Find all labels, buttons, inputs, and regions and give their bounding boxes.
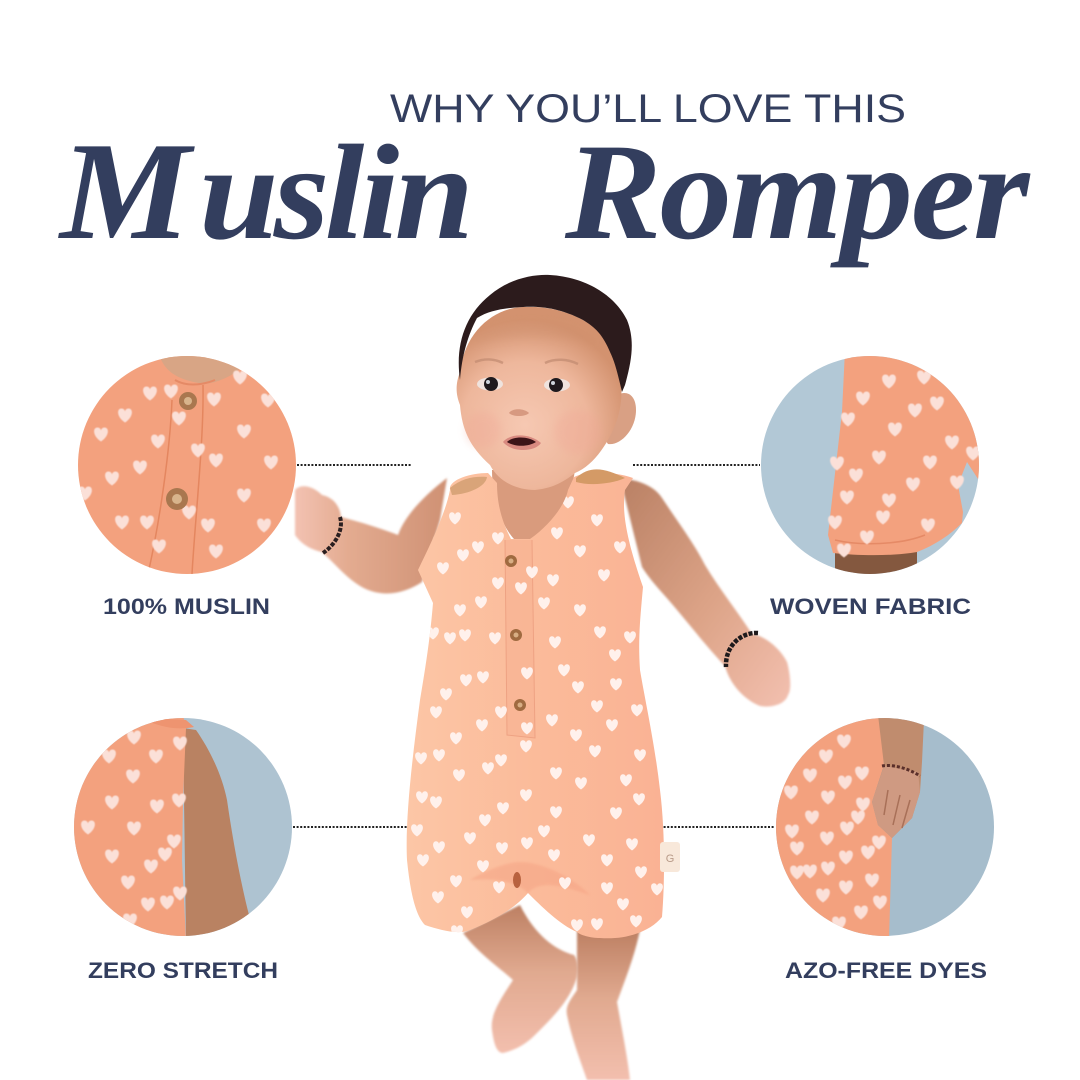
icon: wooden button (179, 392, 197, 410)
shoulder button tab left (450, 477, 487, 495)
panel: 100% muslin detail circle (78, 350, 296, 574)
label: 100% muslin: 100% MUSLIN (103, 594, 270, 619)
subtitle: WHY YOU’LL LOVE THIS (390, 86, 906, 130)
baby forehead shade (470, 322, 600, 345)
title: Romper (564, 115, 1031, 268)
bracelet (882, 765, 920, 776)
connector: azo-free dyes (660, 826, 775, 828)
panel: azo-free dyes detail circle (770, 715, 994, 940)
baby left eye (477, 377, 503, 391)
neck (492, 470, 575, 540)
illustration: baby in peach romper (295, 275, 790, 1080)
baby mouth (503, 435, 541, 450)
icon: wooden button lower (166, 488, 188, 510)
bracelet right (726, 633, 758, 667)
icon: romper button middle (510, 629, 522, 641)
baby hair (459, 275, 632, 392)
garment tag (660, 842, 680, 872)
romper hearts (411, 496, 663, 938)
baby cheeks (465, 410, 602, 454)
bracelet left (323, 517, 341, 553)
baby brows (475, 359, 578, 364)
panel: woven fabric detail circle (761, 350, 985, 580)
garment tag: G (666, 853, 674, 865)
panel: zero stretch detail circle (70, 715, 292, 940)
baby left leg (463, 905, 578, 1053)
label: woven fabric: WOVEN FABRIC (770, 594, 971, 619)
connector: woven fabric (633, 464, 760, 466)
label: zero stretch: ZERO STRETCH (88, 958, 278, 983)
connector: zero stretch (293, 826, 407, 828)
baby face (457, 307, 621, 490)
icon: romper button top (505, 555, 517, 567)
baby right leg (567, 930, 640, 1080)
icon: romper button bottom (514, 699, 526, 711)
title (58, 114, 1031, 269)
baby ear (604, 393, 636, 444)
label: azo-free dyes: AZO-FREE DYES (785, 958, 987, 983)
baby right eye (544, 378, 570, 392)
romper (407, 469, 680, 938)
shoulder button tab right (576, 469, 625, 484)
romper placket (505, 540, 535, 738)
baby left arm (295, 478, 447, 593)
baby nose (509, 409, 529, 416)
title: Muslin (58, 114, 469, 269)
baby right arm (620, 478, 790, 707)
romper gather shadow (470, 862, 590, 895)
connector: 100% muslin (297, 464, 411, 466)
